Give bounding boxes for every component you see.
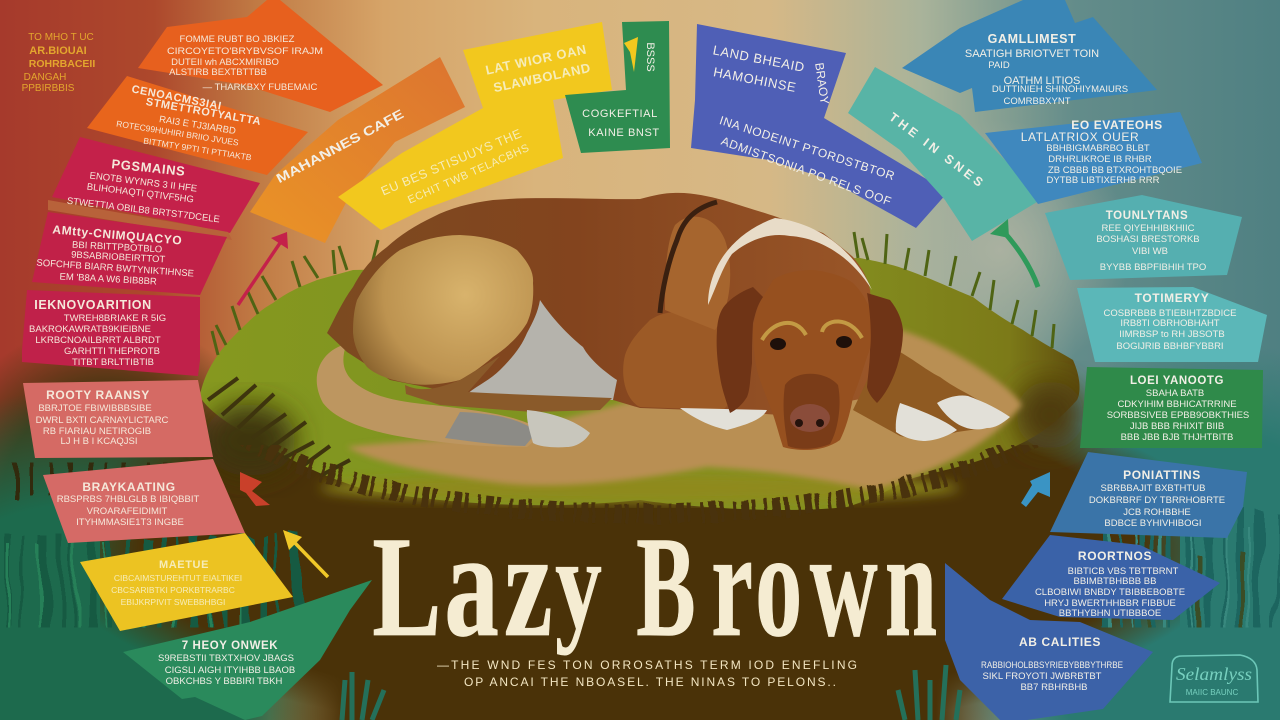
panel: yellow arc bbox=[338, 22, 612, 230]
panel: crimson sector three: TWREH8BRIAKE R 5IG bbox=[64, 313, 166, 324]
panel: orange arrow: DUTEII wh ABCXMIRIBO bbox=[171, 57, 279, 68]
mound: grass blades bbox=[212, 232, 1054, 355]
panel: yellow arc: ECHIT TWB TELACBHS bbox=[406, 142, 531, 207]
panel: orange arc bbox=[250, 57, 465, 243]
panel: teal sector one: VIBI WB bbox=[1132, 246, 1168, 257]
panel: blue sector lower: JCB ROHBBHE bbox=[1123, 507, 1191, 518]
panel: salmon sector two: VROARAFEIDIMIT bbox=[87, 506, 168, 517]
arrow: green bbox=[990, 219, 1038, 287]
title: L bbox=[372, 508, 441, 667]
title: y bbox=[555, 511, 602, 656]
panel: crimson sector one: BLIHOHAQTI QTIVF5HG bbox=[86, 181, 194, 206]
dog: body bbox=[327, 193, 880, 415]
panel: crimson sector two: SOFCHFB BIARR BWTYNIKTIHNSE bbox=[36, 258, 194, 279]
panel: green sector right: CDKYIHIM BBHICATRRINE bbox=[1117, 399, 1237, 410]
icon: yellow spark bbox=[624, 37, 638, 72]
panel: crimson sector two: 9BSABRIOBEIRTTOT bbox=[71, 250, 166, 265]
panel: salmon sector one: LJ H B I KCAQJSI bbox=[60, 436, 138, 447]
panel: blue arrow bbox=[902, 0, 1157, 112]
panel: indigo arc bbox=[691, 24, 948, 228]
dog: right ear bbox=[867, 293, 903, 403]
panel: salmon sector two: ITYHMMASIE1T3 INGBE bbox=[76, 517, 184, 528]
panel: blue arrow lower: BBIMBTBHBBB BB bbox=[1074, 576, 1156, 587]
grassy mound bbox=[200, 232, 1084, 514]
dog: head bbox=[753, 270, 873, 450]
panel: blue arrow bottom: SIKL FROYOTI JWBRBTBT bbox=[983, 671, 1102, 682]
panel: blue arrow: COMRBBXYNT bbox=[1003, 96, 1071, 107]
corner note: PPBIRBBIS bbox=[22, 83, 75, 94]
subtitle: —THE WND FES TON ORROSATHS TERM IOD ENEFLING bbox=[437, 658, 857, 672]
dog: tail bbox=[317, 345, 545, 447]
dog: nose bbox=[790, 404, 830, 432]
dog: neck bbox=[665, 217, 730, 330]
dog: tail tip bbox=[445, 412, 537, 446]
panel: salmon sector one: ROOTY RAANSY bbox=[46, 388, 150, 402]
title bbox=[372, 500, 937, 669]
panel: green sector: S9REBSTII TBXTXHOV JBAGS bbox=[158, 653, 294, 664]
panel: teal sector two: TOTIMERYY bbox=[1135, 291, 1209, 305]
subtitle: OP ANCAI THE NBOASEL. THE NINAS TO PELONS.. bbox=[464, 675, 836, 689]
panel: green sector right: SBAHA BATB bbox=[1146, 388, 1204, 399]
panel: teal sector one: TOUNLYTANS bbox=[1106, 210, 1188, 222]
panel: yellow arc: EU BES STISUUYS THE bbox=[379, 126, 524, 198]
panel: green sector: 7 HEOY ONWEK bbox=[182, 640, 278, 652]
panel: indigo arc: ADMISTSONIA PO RELS OOF bbox=[719, 134, 894, 209]
panel: blue arrow lower: ROORTNOS bbox=[1078, 549, 1152, 563]
panel: orange sector: ROTEC99HUHIRI BRIIO JVUES bbox=[116, 118, 240, 148]
mound: right shade bbox=[1016, 381, 1084, 449]
panel: blue arrow: PAID bbox=[988, 60, 1010, 71]
panel: crimson sector two: EM 'B8A A W6 BIB8BR bbox=[59, 271, 157, 288]
dog: front paws bbox=[680, 395, 1010, 441]
dog: rear paw bbox=[527, 410, 590, 447]
panel: green sector right bbox=[1080, 367, 1263, 448]
panel: crimson sector one bbox=[48, 137, 260, 240]
panel: crimson sector one: PGSMAINS bbox=[111, 156, 186, 179]
panel: blue arrow bottom: BB7 RBHRBHB bbox=[1020, 682, 1088, 693]
panel: salmon sector one: BBRJTOE FBIWIBBBSIBE bbox=[38, 403, 152, 414]
dog: haunch bbox=[353, 235, 533, 385]
panel: teal sector two: IIMRBSP to RH JBSOTB bbox=[1119, 329, 1225, 340]
panel: crimson sector two: BBI RBITTPBOTBLO bbox=[72, 240, 162, 255]
panel: teal sector two: BOGIJRIB BBHBFYBBRI bbox=[1116, 341, 1224, 352]
mound: dark left grass bbox=[204, 404, 296, 476]
panel: yellow arc: LAT WIOR OAN bbox=[484, 42, 588, 78]
panel: green sector: OBKCHBS Y BBBIRI TBKH bbox=[166, 676, 282, 687]
panel: blue arrow bottom: AB CALITIES bbox=[1019, 635, 1101, 649]
bottom grass tufts bbox=[342, 665, 960, 720]
panel: blue sector: LATLATRIOX OUER bbox=[1021, 130, 1139, 144]
panel: blue sector lower bbox=[1050, 452, 1247, 538]
dog: eyes bbox=[770, 336, 852, 350]
panel: teal sector one: BOSHASI BRESTORKB bbox=[1096, 234, 1200, 245]
panel: blue arrow lower: CLBOBIWI BNBDY TBIBBEBOBTE bbox=[1035, 587, 1185, 598]
panel: teal sector one: REE QIYEHHIBKHIIC bbox=[1102, 223, 1195, 234]
dog: belly bbox=[467, 300, 617, 400]
dog bbox=[317, 193, 1010, 450]
panel: blue sector lower: DOKBRBRF DY TBRRHOBRTE bbox=[1089, 495, 1225, 506]
panel: teal sector two: COSBRBBB BTIEBIHTZBDICE bbox=[1103, 308, 1237, 319]
panel: green sector bbox=[123, 580, 372, 720]
panel: yellow sector: CIBCAIMSTUREHTUT EIALTIKEI bbox=[114, 573, 242, 583]
panel: crimson sector two bbox=[32, 212, 227, 295]
panel: orange arrow: FOMME RUBT BO JBKIEZ bbox=[180, 34, 295, 45]
panel: green sector right: BBB JBB BJB THJHTBITB bbox=[1121, 432, 1233, 443]
mound: lower fringe bbox=[240, 445, 1038, 510]
panel: crimson sector one: STWETTIA OBILB8 BRTST7DCELE bbox=[66, 196, 220, 225]
panel: blue arrow: GAMLLIMEST bbox=[988, 32, 1076, 46]
panel: crimson sector three bbox=[22, 290, 200, 376]
stamp: signature: Selamlyss bbox=[1176, 664, 1252, 684]
panel: crimson sector three: GARHTTI THEPROTB bbox=[64, 346, 160, 357]
panel: blue sector lower: PONIATTINS bbox=[1123, 468, 1201, 482]
dog: white neck band bbox=[708, 218, 872, 305]
panel: salmon sector one: RB FIARIAU NETIROGIB bbox=[43, 426, 151, 437]
panel: salmon sector two bbox=[43, 459, 245, 543]
panel: blue arrow lower bbox=[1002, 535, 1220, 620]
panel: orange sector: STMETTROTYALTTA bbox=[145, 96, 262, 128]
panel: salmon sector one: DWRL BXTI CARNAYLICTARC bbox=[36, 415, 169, 426]
panel: indigo arc: HAMOHINSE bbox=[712, 64, 798, 95]
dog: front leg bbox=[853, 345, 1005, 441]
panel: yellow sector: CBCSARIBTKI PORKBTRARBC bbox=[111, 585, 235, 595]
corner note: DANGAH bbox=[24, 72, 66, 83]
panel: crimson sector three: TITBT BRLTTIBTIB bbox=[72, 357, 154, 368]
panel: orange sector: CENOACMS3IAI bbox=[130, 83, 223, 113]
panel: blue arrow: SAATIGH BRIOTVET TOIN bbox=[965, 48, 1099, 60]
panel: orange arrow: ALSTIRB BEXTBTTBB bbox=[169, 67, 267, 78]
dog: shoulder bbox=[623, 312, 739, 410]
panel: blue sector bbox=[985, 112, 1202, 204]
panel: teal sector one: BYYBB BBPFIBHIH TPO bbox=[1100, 262, 1206, 273]
panel: blue arrow bottom bbox=[945, 563, 1153, 720]
panel: blue arrow: OATHM LITIOS bbox=[1004, 75, 1080, 87]
panel: blue arrow lower: HRYJ BWERTHHBBR FIBBUE bbox=[1044, 598, 1176, 609]
panel: orange sector: BITTMTY 9PTI TI PTTIAKTB bbox=[143, 136, 253, 163]
panel: green tab: COGKEFTIAL bbox=[582, 108, 658, 120]
panel: crimson sector three: LKRBCNOAILBRRT ALBRDT bbox=[35, 335, 161, 346]
panel: crimson sector two: AMtty-CNIMQUACYO bbox=[52, 222, 183, 248]
panel: blue arrow: DUTTINIEH SHINOHIYMAIURS bbox=[992, 84, 1128, 95]
panel: green sector: CIGSLI AIGH ITYIHBB LBAOB bbox=[165, 665, 295, 676]
panel: orange arc: MAHANNES CAFE bbox=[274, 106, 406, 186]
panel: blue arrow bottom: RABBIOHOLBBSYRIEBYBBBYTHRBE bbox=[981, 660, 1123, 671]
panel: blue sector lower: BDBCE BYHIVHIBOGI bbox=[1104, 518, 1202, 529]
arrow: red bbox=[240, 472, 270, 506]
panel: indigo arc: BRAOY bbox=[812, 62, 832, 105]
panel: crimson sector three: BAKROKAWRATB9KIEIBNE bbox=[29, 324, 151, 335]
title: rown bbox=[711, 500, 937, 669]
panel: yellow arc: SLAWBOLAND bbox=[492, 60, 592, 95]
panel: green tab: BSSS bbox=[644, 42, 656, 72]
panel: orange sector: RAI3 E TJ3IARBD bbox=[158, 114, 237, 137]
panel: green tab: KAINE BNST bbox=[588, 127, 660, 139]
panel: teal sector one bbox=[1045, 195, 1242, 280]
dog: brow markings bbox=[762, 321, 862, 340]
panel: yellow sector bbox=[80, 533, 293, 631]
panel: salmon sector two: RBSPRBS 7HBLGLB B IBIQBBIT bbox=[57, 494, 199, 505]
title: az bbox=[444, 500, 553, 668]
panel: orange arrow: — THARKBXY FUBEMAIC bbox=[203, 82, 318, 93]
panel: yellow sector: EBIJKRPIVIT SWEBBHBGI bbox=[121, 597, 225, 607]
panel: green sector right: JIJB BBB RHIXIT BIIB bbox=[1130, 421, 1224, 432]
stamp: signature: MAIIC BAUNC bbox=[1186, 688, 1238, 697]
panel: orange arrow: CIRCOYETO'BRYBVSOF IRAJM bbox=[167, 46, 323, 57]
stamp: signature bbox=[1170, 655, 1258, 702]
panel: yellow sector: MAETUE bbox=[159, 559, 209, 571]
corner note: ROHRBACEII bbox=[29, 58, 95, 70]
panel: teal arc bbox=[848, 67, 1037, 241]
panel: teal arc: THE IN SNES bbox=[886, 110, 988, 192]
dog: muzzle bbox=[784, 374, 840, 449]
panel: indigo arc: INA NODEINT PTORDSTBTOR bbox=[718, 113, 897, 183]
dog: back stripe bbox=[660, 202, 717, 313]
panel: blue sector: ZB CBBB BB BTXROHTBQOIE bbox=[1048, 165, 1182, 176]
panel: salmon sector two: BRAYKAATING bbox=[82, 480, 176, 494]
title: B bbox=[636, 506, 696, 666]
arrow: crimson bbox=[238, 232, 288, 305]
panel: teal sector two bbox=[1077, 287, 1267, 362]
panel: green tab bbox=[565, 21, 670, 153]
panel: salmon sector one bbox=[23, 380, 213, 458]
panel: blue sector: DYTBB LIBTIXERHB RRR bbox=[1047, 175, 1160, 186]
panel: blue sector: EO EVATEOHS bbox=[1071, 118, 1163, 132]
panel: crimson sector three: IEKNOVOARITION bbox=[34, 298, 152, 312]
dog: rear leg bbox=[405, 356, 612, 412]
corner note: TO MHO T UC bbox=[28, 32, 94, 43]
panel: blue arrow lower: BIBTICB VBS TBTTBRNT bbox=[1068, 566, 1179, 577]
dog: left ear bbox=[717, 287, 763, 413]
panel: crimson sector one: ENOTB WYNRS 3 II HFE bbox=[89, 170, 198, 195]
panel: indigo arc: LAND BHEAID bbox=[712, 42, 806, 75]
panel: blue sector: BBHBIGMABRBO BLBT bbox=[1046, 143, 1150, 154]
panel: green sector right: SORBBSIVEB EPBB9OBKTHIES bbox=[1107, 410, 1249, 421]
panel: orange sector bbox=[87, 76, 308, 175]
panel: green sector right: LOEI YANOOTG bbox=[1130, 375, 1224, 387]
panel: blue arrow lower: BBTHYBHN UTIBBBOE bbox=[1059, 608, 1161, 619]
panel: blue sector: DRHRLIKROE IB RHBR bbox=[1048, 154, 1152, 165]
mound: dirt patch bbox=[347, 330, 1022, 490]
corner note: AR.BIOUAI bbox=[29, 45, 87, 57]
arrow: blue bbox=[1021, 472, 1050, 507]
panel: orange arrow bbox=[138, 0, 383, 112]
corner note bbox=[22, 32, 95, 94]
panel: teal sector two: IRB8TI OBRHOBHAHT bbox=[1120, 318, 1220, 329]
subtitle bbox=[437, 658, 857, 689]
arrow: yellow bbox=[283, 530, 328, 577]
panel: blue sector lower: SBRBBAJIT BXBTHTUB bbox=[1101, 483, 1205, 494]
